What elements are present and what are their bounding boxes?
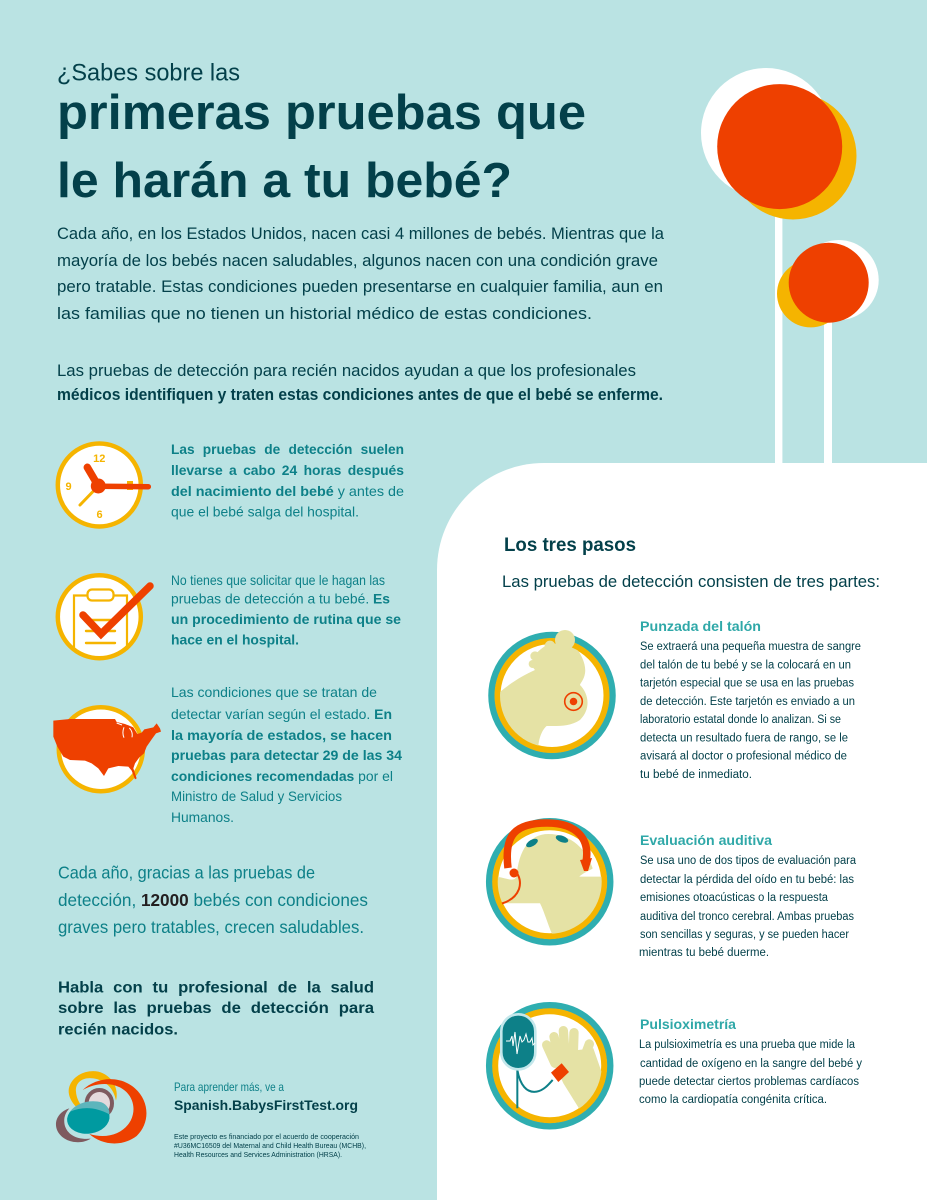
- text: timing of tests: que el bebé salga del hospital.: [171, 504, 359, 520]
- intro paragraph: pero tratable. Estas condiciones pueden presentarse en cualquier familia, aun en: [57, 278, 663, 296]
- intro paragraph: [57, 225, 665, 323]
- text: hearing test: detectar la pérdida del oído en tu bebé: las: [640, 874, 854, 886]
- title: le harán a tu bebé?: [57, 154, 512, 208]
- text: hearing test: emisiones otoacústicas o la respuesta: [640, 892, 829, 904]
- text: heel prick: del talón de tu bebé y se la colocará en un: [640, 660, 851, 672]
- text: routine procedure: No tienes que solicitar que le hagan las: [171, 572, 385, 588]
- text: timing of tests: del nacimiento del bebé y antes de: [171, 483, 404, 499]
- title: ¿Sabes sobre las: [57, 60, 240, 86]
- funding note: Este proyecto es financiado por el acuerdo de cooperación: [174, 1132, 359, 1141]
- website reference: Spanish.BabysFirstTest.org: [174, 1097, 358, 1113]
- icon: pulse oximeter on baby hand: [489, 1005, 610, 1126]
- text: heel prick: de detección. Este tarjetón es enviado a un: [640, 696, 855, 708]
- large balloon: [701, 68, 856, 220]
- statistic: 12000 babies: detección, 12000 bebés con condiciones: [58, 890, 368, 910]
- statistic: 12000 babies: graves pero tratables, crecen saludables.: [58, 917, 364, 937]
- heading: three steps: [502, 535, 880, 591]
- text: pulse oximetry: La pulsioximetría es una prueba que mide la: [639, 1039, 856, 1051]
- text: conditions by state: [171, 684, 402, 825]
- icon: map of United States: [53, 707, 161, 791]
- screening paragraph: Las pruebas de detección para recién nacidos ayudan a que los profesionales: [57, 362, 636, 380]
- icon: baby hearing test: [489, 821, 613, 942]
- icon: clock: 6: [96, 509, 103, 521]
- text: hearing test: [639, 833, 857, 959]
- icon: clock: [58, 444, 148, 526]
- call to action: [58, 980, 374, 1038]
- icon: clock: 12: [93, 453, 105, 465]
- text: timing of tests: Las pruebas de detección suelen: [171, 441, 404, 457]
- statistic: 12000 babies: [58, 862, 368, 937]
- text: heel prick: [640, 619, 861, 781]
- text: heel prick: Se extraerá una pequeña muestra de sangre: [640, 641, 861, 653]
- small balloon: [777, 240, 879, 327]
- funding note: [174, 1132, 366, 1159]
- intro paragraph: las familias que no tienen un historial médico de estas condiciones.: [57, 305, 592, 323]
- text: routine procedure: un procedimiento de rutina que se: [171, 611, 401, 627]
- text: pulse oximetry: puede detectar ciertos problemas cardíacos: [639, 1076, 859, 1088]
- text: heel prick: tarjetón especial que se usa en las pruebas: [640, 678, 854, 690]
- text: hearing test: Evaluación auditiva: [640, 833, 773, 848]
- text: heel prick: avisará al doctor o profesional médico de: [640, 750, 847, 762]
- text: hearing test: mientras tu bebé duerme.: [639, 947, 769, 959]
- text: heel prick: laboratorio estatal donde lo analizan. Si se: [640, 714, 841, 726]
- text: routine procedure: [171, 572, 401, 648]
- text: heel prick: tu bebé de inmediato.: [640, 769, 752, 781]
- website reference: [174, 1080, 358, 1113]
- icon: clock: 9: [65, 481, 72, 493]
- text: timing of tests: llevarse a cabo 24 horas después: [171, 462, 404, 478]
- icon: clipboard with check mark: [58, 575, 150, 658]
- text: conditions by state: Ministro de Salud y Servicios: [171, 788, 342, 804]
- text: hearing test: Se usa uno de dos tipos de evaluación para: [640, 855, 857, 867]
- statistic: 12000 babies: Cada año, gracias a las pruebas de: [58, 862, 315, 882]
- text: conditions by state: Las condiciones que se tratan de: [171, 684, 377, 700]
- text: conditions by state: condiciones recomendadas por el: [171, 768, 393, 784]
- funding note: Health Resources and Services Administration (HRSA).: [174, 1150, 342, 1159]
- funding note: #U36MC16509 del Maternal and Child Health Bureau (MCHB),: [174, 1141, 366, 1150]
- text: conditions by state: la mayoría de estados, se hacen: [171, 727, 392, 743]
- text: routine procedure: hace en el hospital.: [171, 632, 299, 648]
- text: routine procedure: pruebas de detección a tu bebé. Es: [171, 590, 390, 606]
- text: conditions by state: pruebas para detectar 29 de las 34: [171, 747, 402, 763]
- heading: three steps: Los tres pasos: [504, 535, 636, 556]
- title: primeras pruebas que: [57, 86, 586, 140]
- call to action: Habla con tu profesional de la salud: [58, 980, 374, 996]
- text: pulse oximetry: cantidad de oxígeno en la sangre del bebé y: [640, 1058, 862, 1070]
- text: pulse oximetry: como la cardiopatía congénita crítica.: [639, 1094, 827, 1106]
- icon: baby heel prick: [492, 630, 612, 756]
- text: heel prick: Punzada del talón: [640, 619, 761, 634]
- title: [57, 60, 586, 208]
- text: heel prick: detecta un resultado fuera de rango, se le: [640, 732, 848, 744]
- text: hearing test: son sencillas y seguras, y se pueden hacer: [640, 929, 849, 941]
- logo: [56, 1071, 146, 1143]
- white panel background: [437, 463, 927, 1200]
- text: conditions by state: Humanos.: [171, 809, 234, 825]
- text: hearing test: auditiva del tronco cerebral. Ambas pruebas: [640, 911, 854, 923]
- call to action: sobre las pruebas de detección para: [58, 1000, 374, 1017]
- heading: three steps: Las pruebas de detección consisten de tres partes:: [502, 572, 880, 591]
- call to action: recién nacidos.: [58, 1022, 178, 1038]
- text: pulse oximetry: [639, 1017, 862, 1106]
- text: timing of tests: [171, 441, 404, 520]
- decorative balloons: [701, 68, 879, 464]
- balloon stems: [775, 200, 832, 464]
- text: pulse oximetry: Pulsioximetría: [640, 1017, 736, 1032]
- screening paragraph: [57, 362, 663, 404]
- intro paragraph: Cada año, en los Estados Unidos, nacen casi 4 millones de bebés. Mientras que la: [57, 225, 665, 243]
- intro paragraph: mayoría de los bebés nacen saludables, algunos nacen con una condición grave: [57, 252, 658, 270]
- website reference: Para aprender más, ve a: [174, 1080, 284, 1094]
- text: conditions by state: detectar varían según el estado. En: [171, 706, 392, 722]
- screening paragraph: médicos identifiquen y traten estas condiciones antes de que el bebé se enferme.: [57, 386, 663, 404]
